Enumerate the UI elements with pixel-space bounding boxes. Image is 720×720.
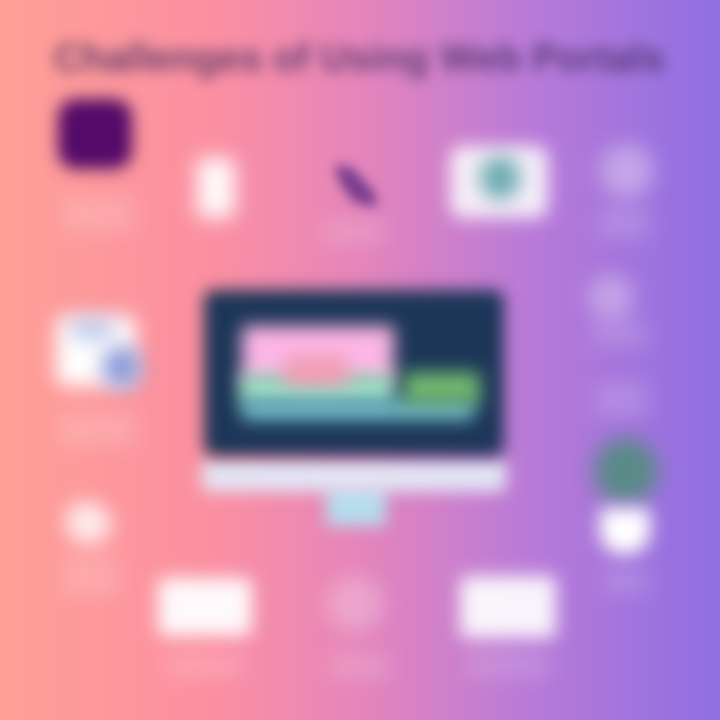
label: purple square	[62, 196, 134, 232]
icon: bottom center	[326, 576, 384, 632]
label: right middle	[592, 322, 648, 346]
screen green panel	[240, 374, 394, 404]
label: cursor	[320, 222, 386, 242]
plant pot	[600, 508, 650, 554]
chart card top tint	[70, 318, 114, 340]
label: plant	[604, 570, 648, 592]
card graphic	[480, 156, 520, 200]
chart card background	[56, 316, 136, 386]
icon: bottom card left	[158, 578, 252, 636]
icon: bottom card right	[460, 576, 556, 638]
icon: purple square	[58, 99, 132, 169]
screen green chart	[404, 372, 480, 404]
screen pink panel	[242, 326, 394, 384]
monitor screen	[204, 290, 504, 456]
icon: top right circle	[600, 144, 654, 198]
label: top right	[600, 208, 650, 238]
chart card graphic	[102, 346, 142, 388]
label: bottom center	[330, 654, 390, 678]
monitor	[190, 276, 516, 536]
screen teal band	[242, 398, 474, 420]
icon: lower left	[66, 502, 112, 544]
icon: potted plant	[582, 426, 670, 566]
label: left chart	[58, 412, 136, 446]
label: lower left	[62, 556, 120, 596]
icon: cursor	[328, 158, 384, 214]
label: right lower	[596, 382, 648, 416]
icon: phone	[197, 158, 235, 218]
label: bottom card right	[466, 654, 550, 676]
card background	[450, 146, 548, 218]
screen rose patch	[284, 356, 348, 386]
icon: left chart card	[43, 302, 154, 401]
monitor chin	[202, 460, 506, 492]
plant leaves	[594, 438, 658, 504]
title: Challenges of Using Web Portals	[54, 37, 664, 80]
icon: browser card	[438, 134, 560, 230]
icon: right middle	[588, 274, 634, 320]
monitor stand	[326, 484, 386, 526]
label: bottom card left	[166, 654, 244, 676]
